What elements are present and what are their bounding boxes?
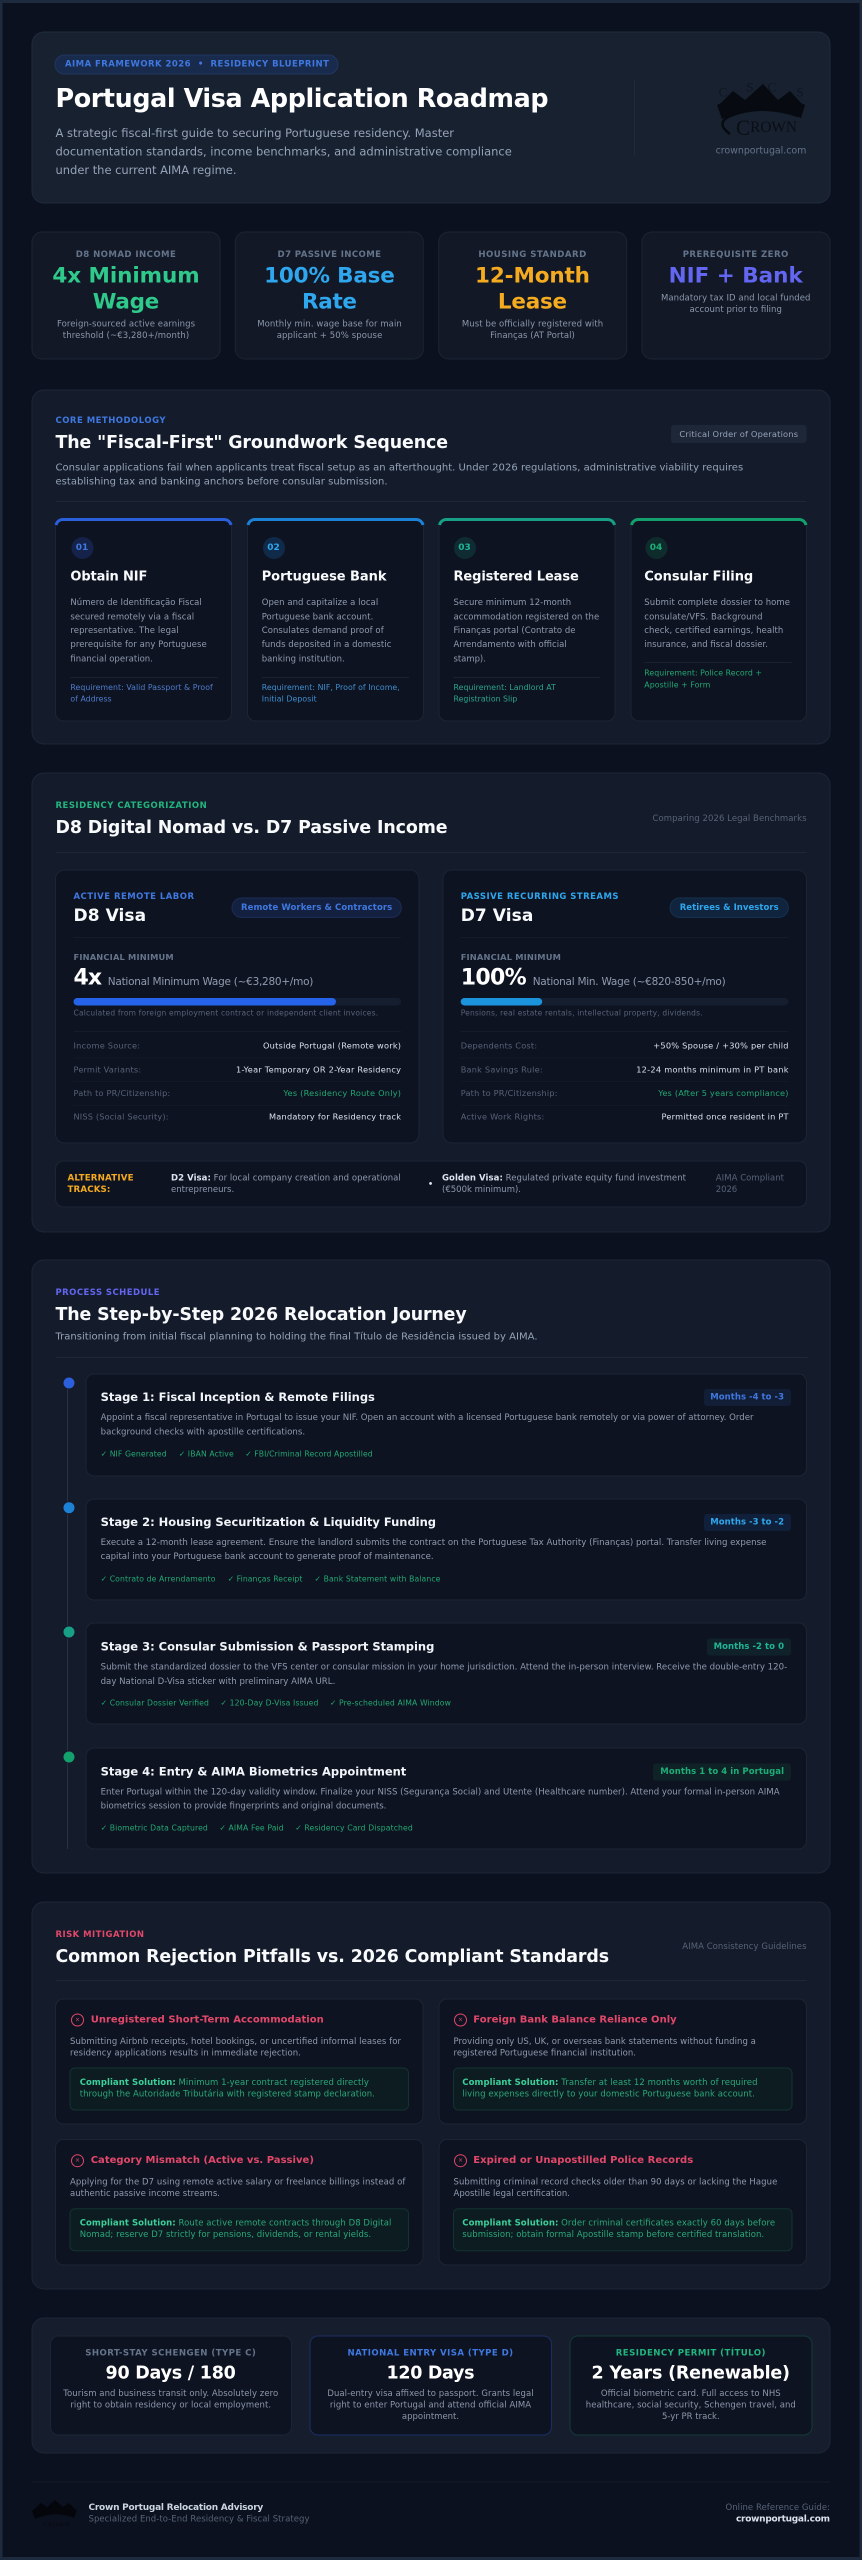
pitfall 3: Applying for the D7 using remote active salary or freelance billings instead of — [70, 2178, 406, 2188]
stage 4: Stage 4: Entry & AIMA Biometrics Appointment — [101, 1764, 407, 1778]
alternative tracks strip: • — [428, 1180, 433, 1188]
stat card: D7 passive income: D7 PASSIVE INCOME — [278, 250, 381, 260]
step card 2: Open and capitalize a local — [262, 598, 378, 608]
alternative tracks strip — [56, 1161, 806, 1207]
step card 4: Requirement: Police Record + — [644, 668, 762, 678]
stage 4: ✓ Biometric Data Captured — [101, 1824, 208, 1832]
progress bar — [461, 998, 788, 1006]
step card 3: 03 — [458, 543, 471, 553]
panel: visa comparison — [32, 773, 830, 1232]
step card 3: Secure minimum 12-month — [454, 598, 571, 608]
step card 2: Initial Deposit — [262, 694, 317, 704]
pitfall 4: × — [458, 2157, 463, 2164]
hero badge — [55, 55, 338, 74]
icon: footer crown logo: CROWN — [43, 2522, 70, 2528]
step card 1: 01 — [76, 543, 88, 553]
icon: crown logo: C — [768, 80, 776, 94]
stage 4: ✓ Residency Card Dispatched — [295, 1824, 413, 1832]
panel: rejection pitfalls — [32, 1902, 830, 2289]
footer brand text — [88, 2503, 310, 2524]
panel: core methodology — [32, 390, 830, 744]
comparison rows: Path to PR/Citizenship: — [74, 1088, 170, 1098]
stat card: D7 passive income: Monthly min. wage base for main — [257, 320, 402, 330]
duration card: national visa: right to enter Portugal and attend official AIMA — [330, 2400, 531, 2410]
stage 2: Execute a 12-month lease agreement. Ensure the landlord submits the contract on the Portuguese Tax Authority (Finanças) portal. Transfer living expense — [101, 1538, 766, 1548]
step card 1: of Address — [70, 694, 112, 704]
duration card: national visa: NATIONAL ENTRY VISA (TYPE D) — [348, 2348, 514, 2358]
step card 1: representative. The legal — [70, 626, 179, 636]
step card 3: Registered Lease — [454, 570, 579, 584]
hero description: A strategic fiscal-first guide to securing Portuguese residency. Master — [56, 126, 454, 140]
duration card: residency permit: RESIDENCY PERMIT (TÍTULO) — [616, 2346, 766, 2358]
duration card: residency permit: healthcare, social security, Schengen travel, and — [586, 2400, 796, 2410]
pitfall 2: living expenses directly to your domestic Portuguese bank account. — [462, 2090, 755, 2100]
description: Transitioning from initial fiscal planning to holding the final Título de Residência issued by AIMA. — [54, 1330, 538, 1342]
step card 1: prerequisite for any Portuguese — [70, 640, 207, 650]
card: D8 visa: FINANCIAL MINIMUM — [74, 952, 174, 962]
description: establishing tax and banking anchors before consular submission. — [56, 476, 388, 488]
duration card: national visa — [310, 2336, 552, 2435]
stage 3: Stage 3: Consular Submission & Passport Stamping — [101, 1640, 434, 1654]
hero description: under the current AIMA regime. — [56, 163, 236, 177]
pitfall 2 — [439, 1999, 806, 2124]
pitfall 4: Apostille legal certification. — [454, 2189, 570, 2199]
stat card: D7 passive income: Rate — [302, 290, 357, 314]
pitfall 1: Unregistered Short-Term Accommodation — [91, 2014, 324, 2026]
stat card: D8 nomad income: D8 NOMAD INCOME — [76, 250, 176, 260]
step card 4: consulate/VFS. Background — [644, 612, 762, 622]
pitfall 4: Submitting criminal record checks older than 90 days or lacking the Hague — [454, 2178, 777, 2188]
hero panel — [32, 32, 830, 203]
badge — [671, 425, 806, 443]
card: D7 visa: PASSIVE RECURRING STREAMS — [461, 892, 619, 902]
logo caption: crownportugal.com — [716, 146, 806, 156]
stat card: D7 passive income: 100% Base — [264, 264, 395, 288]
card: D7 visa: D7 Visa — [461, 906, 533, 926]
eyebrow: RISK MITIGATION — [56, 1930, 144, 1940]
comparison rows: Outside Portugal (Remote work) — [263, 1041, 401, 1051]
icon: crown logo: S — [796, 84, 804, 100]
step card 4 — [631, 519, 806, 721]
pitfall 4 — [439, 2140, 806, 2265]
step card 4: insurance, and fiscal dossier. — [644, 640, 768, 650]
icon: footer crown logo — [32, 2500, 77, 2528]
duration card: national visa: Dual-entry visa affixed to passport. Grants legal — [327, 2389, 534, 2399]
comparison rows: Permit Variants: — [74, 1064, 141, 1074]
step card 3: accommodation registered on the — [454, 612, 599, 622]
hero description — [56, 126, 512, 177]
title: Portugal Visa Application Roadmap — [56, 83, 548, 113]
step card 1: Requirement: Valid Passport & Proof — [70, 683, 213, 692]
stat card: D8 nomad income: threshold (~€3,280+/month) — [63, 331, 189, 341]
step card 3: stamp). — [454, 654, 486, 664]
step card 4: Apostille + Form — [644, 680, 710, 690]
step card 3 — [439, 519, 615, 721]
stage 1: ✓ NIF Generated — [101, 1450, 167, 1458]
footer — [32, 2482, 830, 2528]
stat card: housing standard: Lease — [498, 290, 567, 314]
step card 1: secured remotely via a fiscal — [70, 612, 194, 622]
stage 3: day National D-Visa sticker with preliminary AIMA URL. — [101, 1677, 335, 1687]
footer reference — [726, 2503, 830, 2524]
stage 2: ✓ Contrato de Arrendamento — [101, 1574, 216, 1584]
audience pill: Remote Workers & Contractors — [241, 903, 392, 913]
duration card: national visa: 120 Days — [386, 2364, 474, 2384]
step card 3: Registration Slip — [454, 694, 517, 704]
pitfall 4: Expired or Unapostilled Police Records — [473, 2155, 693, 2166]
alternative tracks strip: ALTERNATIVE — [68, 1174, 134, 1184]
card: D8 visa: ACTIVE REMOTE LABOR — [74, 892, 194, 902]
financial minimum figure — [74, 966, 313, 990]
step card 2: funds deposited in a domestic — [262, 640, 392, 650]
comparison rows: Yes (Residency Route Only) — [282, 1088, 401, 1098]
stat card: prerequisite zero: account prior to filing — [690, 305, 782, 315]
stage 3: Submit the standardized dossier to the VFS center or consular mission in your home jurisdiction. Attend the in-person interview. Receive the double-entry 120- — [101, 1662, 787, 1672]
comparison rows: Mandatory for Residency track — [269, 1112, 401, 1122]
stat card: prerequisite zero: PREREQUISITE ZERO — [683, 250, 789, 260]
stat card: prerequisite zero: NIF + Bank — [669, 264, 803, 288]
stat card: D8 nomad income: Wage — [93, 290, 159, 314]
hero badge: AIMA FRAMEWORK 2026 • RESIDENCY BLUEPRINT — [65, 60, 329, 70]
pitfall 3: authentic passive income streams. — [70, 2189, 220, 2199]
stage 4: Enter Portugal within the 120-day validity window. Finalize your NISS (Segurança Social) and Utente (Healthcare number). Attend your formal in-person AIMA — [101, 1788, 780, 1798]
step card 3: Arrendamento with official — [454, 640, 567, 650]
audience pill — [670, 898, 788, 918]
icon: crown logo: CROWN — [736, 114, 797, 140]
card: D7 visa: FINANCIAL MINIMUM — [461, 952, 561, 962]
duration card: Schengen: Tourism and business transit only. Absolutely zero — [62, 2389, 278, 2399]
duration card: residency permit: 2 Years (Renewable) — [592, 2364, 790, 2384]
duration card: national visa: appointment. — [402, 2412, 459, 2422]
badge: Critical Order of Operations — [679, 429, 798, 439]
duration card: residency permit: Official biometric card. Full access to NHS — [601, 2389, 781, 2399]
comparison rows: Active Work Rights: — [461, 1112, 544, 1122]
step card 1: financial operation. — [70, 654, 153, 664]
side note: Comparing 2026 Legal Benchmarks — [652, 814, 807, 824]
stat card: housing standard — [439, 232, 627, 359]
alternative tracks strip: 2026 — [716, 1185, 737, 1195]
comparison rows — [461, 1041, 789, 1122]
stage 1 — [63, 1374, 806, 1476]
pitfall 2: Providing only US, UK, or overseas bank statements without funding a — [454, 2037, 756, 2047]
stage 4 — [63, 1748, 806, 1849]
comparison rows: Path to PR/Citizenship: — [461, 1088, 558, 1098]
stage 4: Months 1 to 4 in Portugal — [660, 1767, 784, 1777]
stage 1: ✓ IBAN Active — [179, 1450, 234, 1458]
heading: D8 Digital Nomad vs. D7 Passive Income — [56, 818, 448, 838]
step card 1 — [56, 519, 232, 721]
icon: crown logo — [717, 80, 805, 140]
stage 2: capital into your Portuguese bank account to generate proof of maintenance. — [101, 1552, 434, 1562]
pitfall 3: Category Mismatch (Active vs. Passive) — [91, 2155, 314, 2166]
card: D8 visa — [56, 870, 419, 1143]
stage 4: biometrics session to provide fingerprints and original documents. — [101, 1802, 386, 1812]
stage 3: ✓ 120-Day D-Visa Issued — [220, 1698, 319, 1708]
panel: visa duration comparison — [32, 2318, 830, 2453]
duration card: Schengen — [50, 2336, 292, 2435]
duration card: Schengen: SHORT-STAY SCHENGEN (TYPE C) — [85, 2348, 256, 2358]
stage 3: Months -2 to 0 — [714, 1642, 784, 1652]
heading: Common Rejection Pitfalls vs. 2026 Compliant Standards — [56, 1947, 609, 1967]
duration card: residency permit — [570, 2336, 812, 2435]
pitfall 1: through the Autoridade Tributária with registered stamp declaration. — [80, 2090, 375, 2100]
pitfall 4: submission; obtain formal Apostille stamp before certified translation. — [462, 2230, 764, 2240]
pitfall 1: × — [75, 2016, 80, 2024]
eyebrow: RESIDENCY CATEGORIZATION — [56, 801, 207, 811]
stage 3: ✓ Consular Dossier Verified — [101, 1698, 209, 1708]
stat card: prerequisite zero: Mandatory tax ID and local funded — [661, 294, 810, 304]
stat card: housing standard: Finanças (AT Portal) — [490, 331, 575, 341]
step card 2: Consulates demand proof of — [262, 626, 385, 636]
pitfall 3: Nomad; reserve D7 strictly for pensions, dividends, or rental yields. — [80, 2230, 371, 2240]
footer brand text: Specialized End-to-End Residency & Fiscal Strategy — [88, 2514, 310, 2524]
duration card: residency permit: 5-yr PR track. — [662, 2412, 720, 2422]
card: D8 visa: Calculated from foreign employment contract or independent client invoices. — [74, 1008, 378, 1018]
footer brand text: Crown Portugal Relocation Advisory — [88, 2503, 263, 2513]
pitfall 1: residency applications results in immediate rejection. — [70, 2048, 301, 2058]
stat card: D7 passive income — [235, 232, 423, 359]
side note: AIMA Consistency Guidelines — [682, 1942, 807, 1952]
step card 4: check, certified earnings, health — [644, 626, 783, 636]
stat card: D8 nomad income: 4x Minimum — [52, 264, 200, 288]
heading: The "Fiscal-First" Groundwork Sequence — [56, 433, 448, 453]
description — [56, 462, 743, 488]
card: D7 visa: Pensions, real estate rentals, intellectual property, dividends. — [461, 1008, 703, 1018]
stage 2: Months -3 to -2 — [710, 1518, 784, 1528]
pitfall 1: Submitting Airbnb receipts, hotel bookings, or uncertified informal leases for — [70, 2037, 402, 2047]
alternative tracks strip: AIMA Compliant — [716, 1174, 785, 1184]
pitfall 2: registered Portuguese financial institution. — [454, 2048, 636, 2058]
audience pill — [232, 898, 401, 918]
step card 4: Submit complete dossier to home — [644, 598, 790, 608]
comparison rows: NISS (Social Security): — [74, 1112, 168, 1122]
comparison rows: Yes (After 5 years compliance) — [657, 1088, 788, 1098]
step card 2: 02 — [267, 543, 280, 553]
alternative tracks strip: Golden Visa: Regulated private equity fund investment — [442, 1174, 687, 1184]
pitfall 3: Compliant Solution: Route active remote contracts through D8 Digital — [80, 2219, 391, 2229]
stage 1: Stage 1: Fiscal Inception & Remote Filings — [101, 1390, 375, 1404]
pitfall 3 — [56, 2140, 423, 2265]
stage 2: ✓ Bank Statement with Balance — [314, 1574, 441, 1584]
stat card: D8 nomad income — [32, 232, 220, 359]
duration card: Schengen: 90 Days / 180 — [106, 2364, 236, 2384]
step card 1: Obtain NIF — [70, 570, 147, 584]
stage 1: ✓ FBI/Criminal Record Apostilled — [245, 1450, 373, 1458]
stage 2: Stage 2: Housing Securitization & Liquidity Funding — [101, 1515, 436, 1529]
footer reference: crownportugal.com — [736, 2514, 830, 2524]
footer reference: Online Reference Guide: — [726, 2503, 830, 2513]
pitfall 1 — [56, 1999, 423, 2124]
audience pill: Retirees & Investors — [680, 903, 779, 913]
step card 3: Requirement: Landlord AT — [454, 683, 556, 692]
card: D7 visa — [443, 870, 806, 1143]
stat card: housing standard: Must be officially registered with — [462, 320, 603, 330]
step card 2 — [248, 519, 424, 721]
card: D8 visa: D8 Visa — [74, 906, 146, 926]
step card 3: Finanças portal (Contrato de — [454, 626, 576, 636]
pitfall 1: Compliant Solution: Minimum 1-year contract registered directly — [80, 2078, 369, 2088]
step card 2: Portuguese bank account. — [262, 612, 373, 622]
financial minimum figure — [461, 966, 726, 990]
alternative tracks strip: (€500k minimum). — [442, 1185, 521, 1195]
comparison rows: Permitted once resident in PT — [662, 1112, 789, 1122]
alternative tracks strip: TRACKS: — [68, 1185, 110, 1195]
alternative tracks strip: entrepreneurs. — [171, 1185, 234, 1195]
progress bar — [74, 998, 401, 1006]
icon: crown logo: S — [746, 80, 754, 94]
step card 4: 04 — [650, 543, 662, 553]
comparison rows — [74, 1041, 401, 1122]
stage 2: ✓ Finanças Receipt — [228, 1574, 302, 1584]
stage 1: Appoint a fiscal representative in Portugal to issue your NIF. Open an account with a licensed Portuguese bank remotely or via power of attorney. Order — [101, 1413, 754, 1423]
step card 2: Requirement: NIF, Proof of Income, — [262, 683, 400, 692]
pitfall 4: Compliant Solution: Order criminal certificates exactly 60 days before — [462, 2219, 775, 2229]
comparison rows: 1-Year Temporary OR 2-Year Residency — [236, 1064, 401, 1074]
pitfall 2: × — [458, 2016, 463, 2024]
stat card: D8 nomad income: Foreign-sourced active earnings — [57, 320, 196, 330]
stat card: housing standard: HOUSING STANDARD — [478, 250, 587, 260]
duration card: Schengen: right to obtain residency or local employment. — [70, 2400, 271, 2410]
step card 4: Consular Filing — [644, 570, 753, 584]
alternative tracks strip: D2 Visa: For local company creation and operational — [171, 1174, 401, 1184]
eyebrow: CORE METHODOLOGY — [56, 416, 166, 426]
description: Consular applications fail when applicants treat fiscal setup as an afterthought. Under 2026 regulations, administrative viability requires — [56, 462, 743, 474]
comparison rows: Dependents Cost: — [461, 1041, 537, 1051]
comparison rows: +50% Spouse / +30% per child — [653, 1041, 788, 1051]
stage 1: background checks with apostille certifications. — [101, 1428, 305, 1438]
stage 1: Months -4 to -3 — [710, 1392, 784, 1402]
financial minimum figure: National Minimum Wage (~€3,280+/mo) — [108, 976, 313, 988]
comparison rows: Income Source: — [74, 1041, 140, 1051]
step card 2: banking institution. — [262, 654, 345, 664]
heading: The Step-by-Step 2026 Relocation Journey — [56, 1305, 467, 1325]
stage 3: ✓ Pre-scheduled AIMA Window — [330, 1698, 451, 1708]
financial minimum figure: 100% — [461, 966, 527, 990]
pitfall 3: × — [75, 2157, 80, 2164]
stage 4: ✓ AIMA Fee Paid — [219, 1824, 284, 1832]
stat card: D7 passive income: applicant + 50% spouse — [277, 331, 382, 341]
hero description: documentation standards, income benchmarks, and administrative compliance — [56, 144, 512, 158]
step card 1: Número de Identificação Fiscal — [70, 598, 202, 608]
stage 2 — [63, 1499, 806, 1600]
pitfall 2: Compliant Solution: Transfer at least 12 months worth of required — [462, 2078, 758, 2088]
comparison rows: Bank Savings Rule: — [461, 1064, 543, 1074]
step card 2: Portuguese Bank — [262, 570, 387, 584]
financial minimum figure: National Min. Wage (~€820-850+/mo) — [533, 976, 726, 988]
financial minimum figure: 4x — [74, 966, 102, 990]
icon: crown logo: C — [719, 84, 727, 100]
eyebrow: PROCESS SCHEDULE — [56, 1288, 160, 1298]
stat card: prerequisite zero — [642, 232, 830, 359]
comparison rows: 12-24 months minimum in PT bank — [636, 1064, 789, 1074]
timeline line — [67, 1385, 68, 1849]
stat card: housing standard: 12-Month — [475, 264, 590, 288]
pitfall 2: Foreign Bank Balance Reliance Only — [473, 2014, 677, 2026]
stage 3 — [63, 1623, 806, 1724]
panel: relocation journey — [32, 1260, 830, 1873]
